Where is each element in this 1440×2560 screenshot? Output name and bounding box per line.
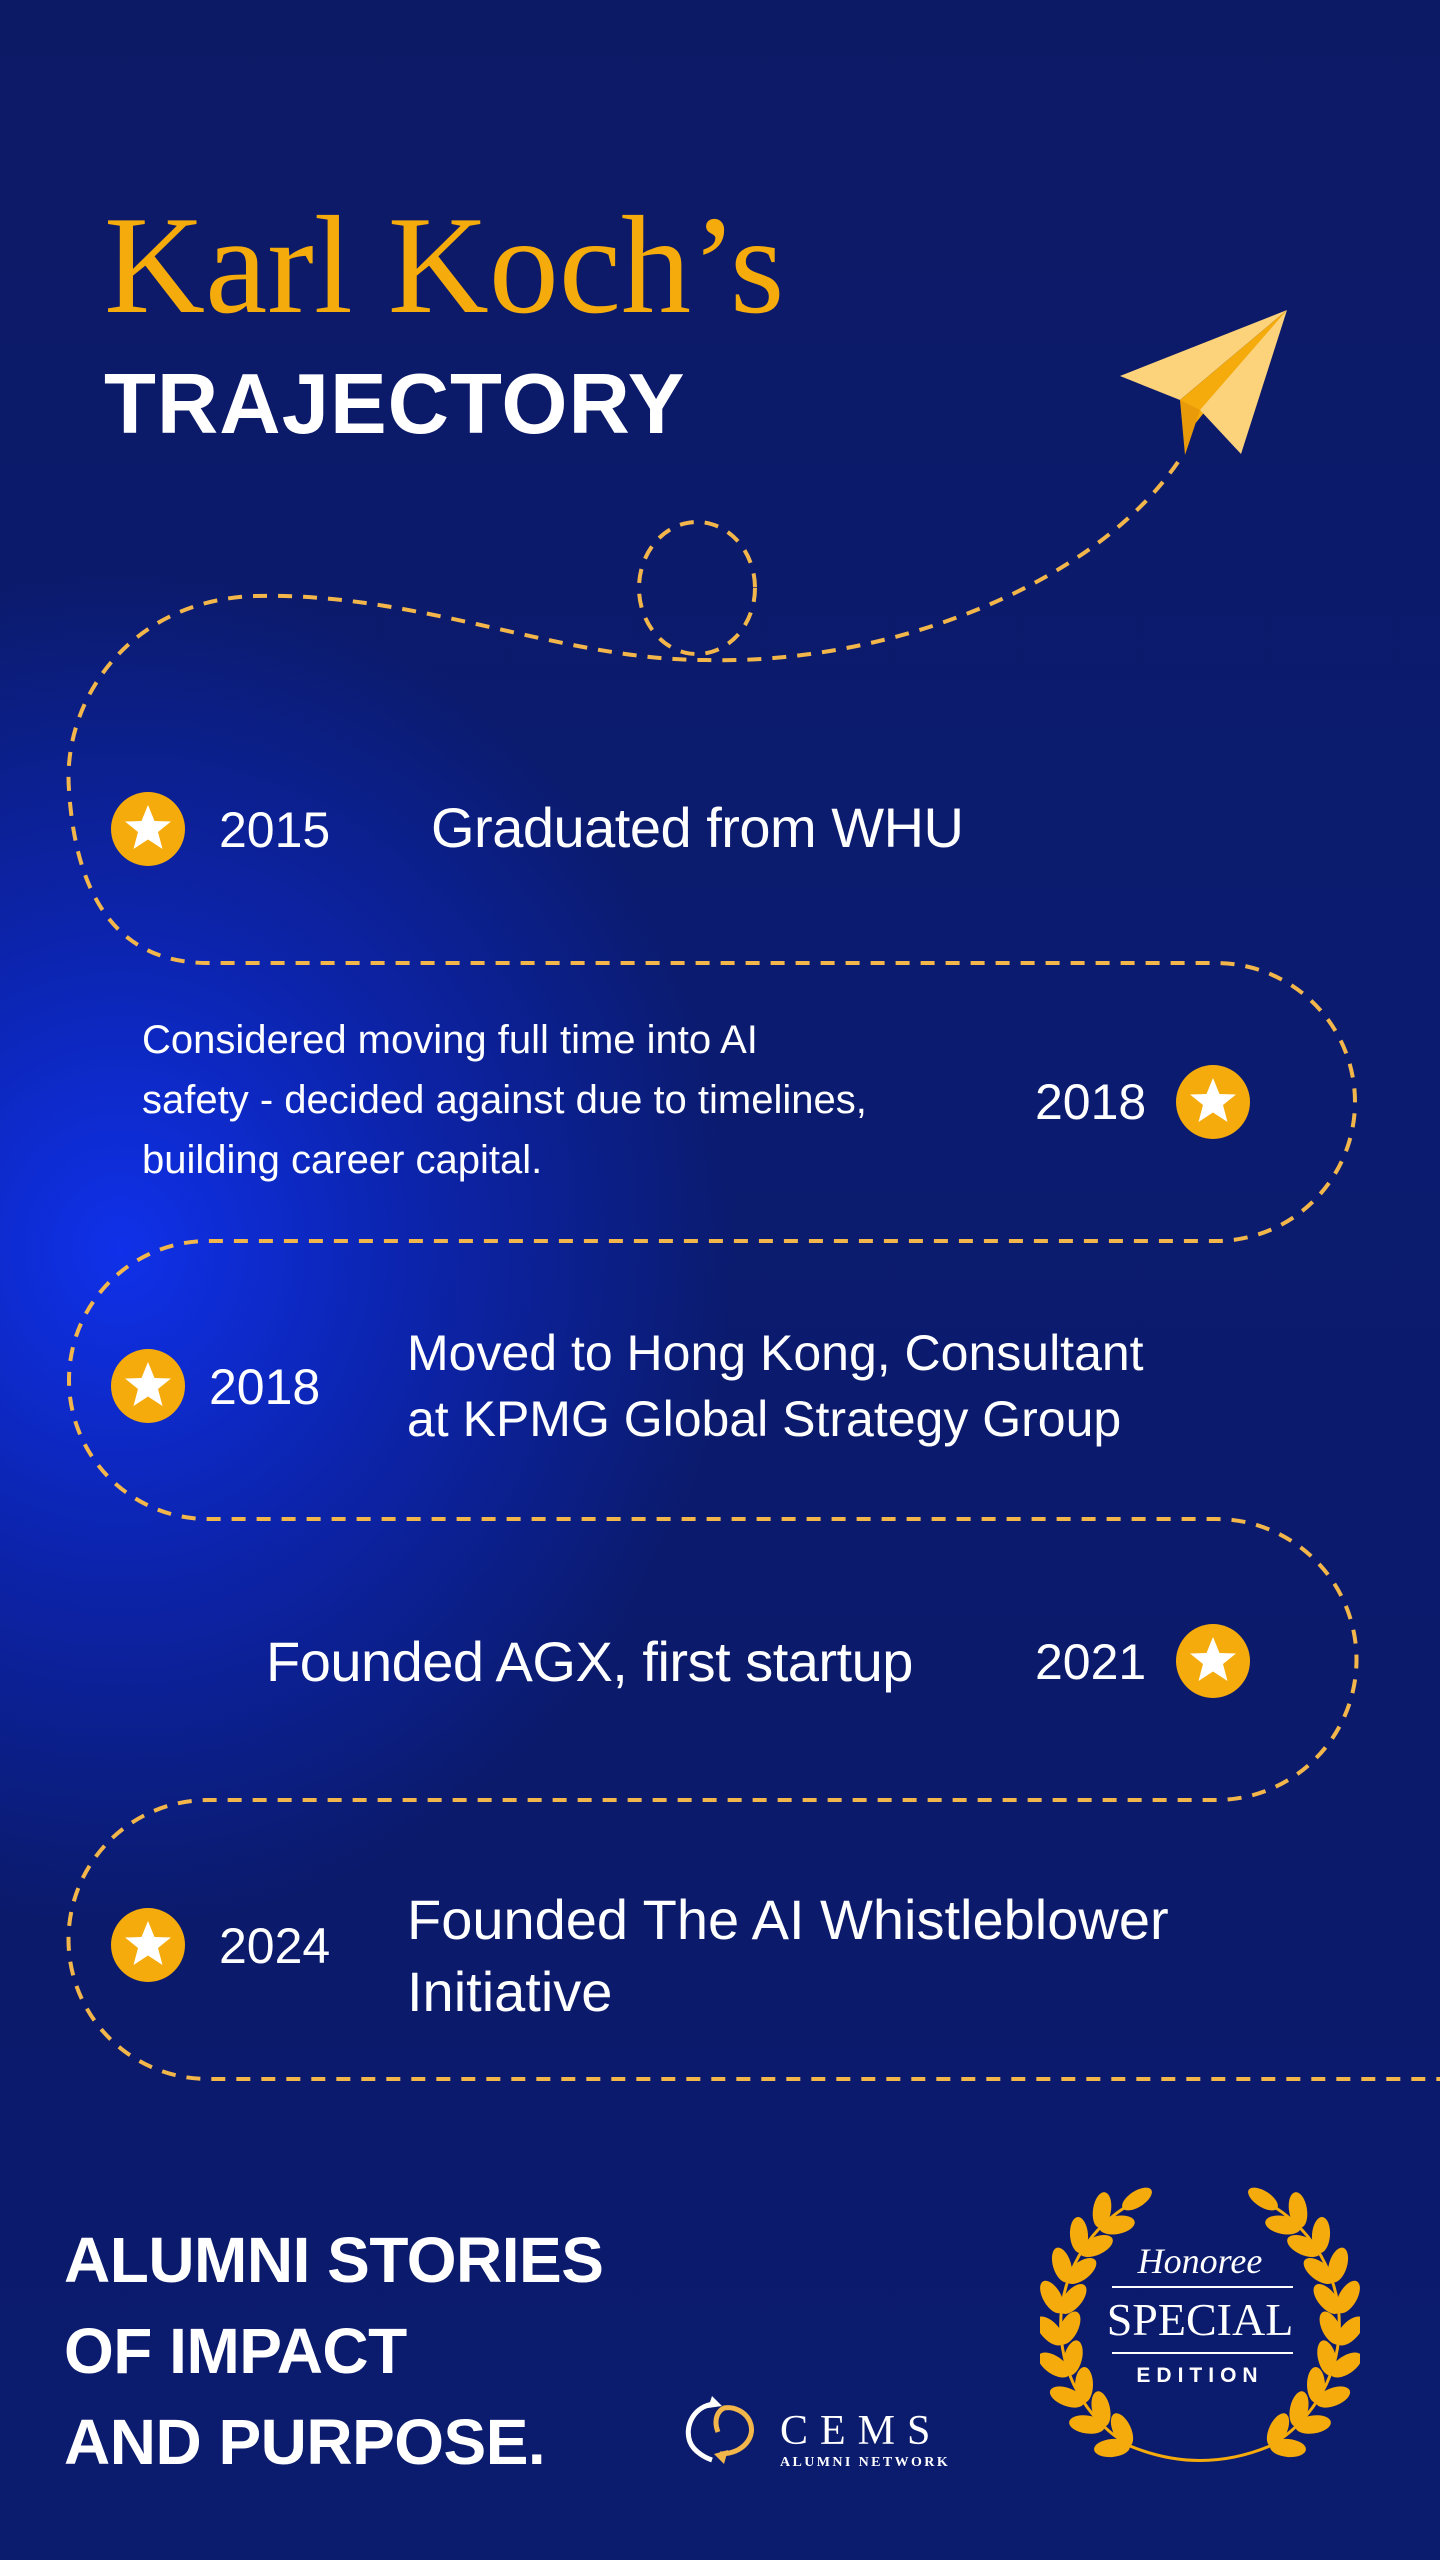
title: trajectory: TRAJECTORY [104, 357, 685, 452]
event text: Considered moving full time into AI [142, 1018, 758, 1062]
year: 2021 [1035, 1634, 1146, 1690]
laurel wreath [1040, 2188, 1360, 2462]
logo text: CEMS [780, 2408, 942, 2454]
milestone 2021 [266, 1624, 1250, 1698]
event text: Founded AGX, first startup [266, 1630, 913, 1693]
logo: CEMS alumni network: ALUMNI NETWORK [780, 2455, 950, 2470]
milestone 2015 [111, 792, 964, 866]
icon: star [1176, 1624, 1250, 1698]
milestone 2024 [111, 1888, 1169, 2023]
badge text: Honoree [1138, 2241, 1262, 2281]
footer tagline: OF IMPACT [64, 2315, 407, 2387]
icon: CEMS swirl [686, 2396, 754, 2464]
footer tagline: AND PURPOSE. [64, 2406, 545, 2478]
icon: star [111, 1908, 185, 1982]
icon: paper plane [1120, 310, 1287, 455]
milestone 2018 AI safety [142, 1018, 1250, 1182]
footer tagline [64, 2224, 603, 2478]
badge: honoree special edition laurel: EDITION [1136, 2364, 1264, 2387]
footer tagline: ALUMNI STORIES [64, 2224, 603, 2296]
event text [407, 1325, 1144, 1447]
event text: safety - decided against due to timelines, [142, 1078, 867, 1122]
event text [142, 1018, 867, 1182]
year: 2018 [1035, 1074, 1146, 1130]
year: 2024 [219, 1918, 330, 1974]
event text: building career capital. [142, 1138, 542, 1182]
event text [407, 1888, 1169, 2023]
badge: honoree special edition laurel: SPECIAL [1107, 2294, 1293, 2345]
logo: CEMS alumni network [686, 2396, 950, 2470]
icon: star [111, 792, 185, 866]
badge: honoree special edition laurel [1040, 2188, 1360, 2462]
icon: star [111, 1349, 185, 1423]
icon: star [1176, 1065, 1250, 1139]
milestone 2018 KPMG [111, 1325, 1144, 1447]
event text: Initiative [407, 1960, 612, 2023]
year: 2018 [209, 1359, 320, 1415]
event text: Founded The AI Whistleblower [407, 1888, 1169, 1951]
event text: at KPMG Global Strategy Group [407, 1391, 1121, 1447]
event text: Moved to Hong Kong, Consultant [407, 1325, 1144, 1381]
title: name: Karl Koch’s [104, 188, 784, 343]
year: 2015 [219, 802, 330, 858]
event text: Graduated from WHU [431, 796, 964, 859]
